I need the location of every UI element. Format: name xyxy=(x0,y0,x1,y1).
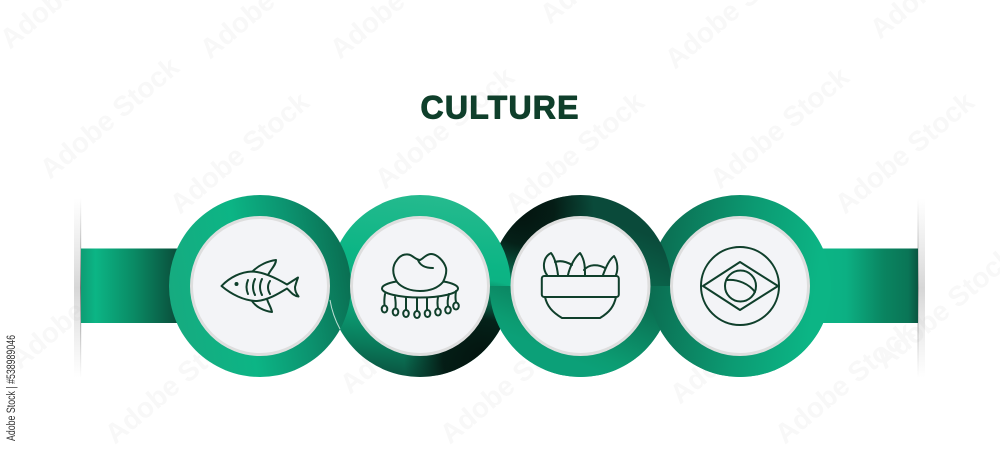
watermark: Adobe Stock xyxy=(4,241,155,375)
watermark: Adobe Stock xyxy=(434,316,585,450)
right end cap line xyxy=(918,198,925,378)
right ribbon band xyxy=(820,248,918,323)
watermark: Adobe Stock xyxy=(34,51,185,185)
title: CULTURE xyxy=(420,90,578,126)
watermark: Adobe Stock xyxy=(769,316,920,450)
interlocking rings xyxy=(169,195,831,377)
icon: brazil flag xyxy=(701,247,779,325)
icon: shark xyxy=(222,260,298,312)
watermark: Adobe Stock xyxy=(829,86,980,220)
watermark: Adobe Stock xyxy=(334,266,485,400)
stock id side label: Adobe Stock | #538989046 xyxy=(6,335,18,441)
panel: hat xyxy=(352,218,488,354)
watermark: Adobe Stock xyxy=(704,61,855,195)
watermark: Adobe Stock xyxy=(99,316,250,450)
panel: bowl xyxy=(512,218,649,354)
infographic canvas xyxy=(6,95,925,441)
watermark: Adobe Stock xyxy=(664,276,815,410)
icon: bowl of leaves xyxy=(542,253,619,318)
watermark: Adobe Stock xyxy=(499,86,650,220)
panel: flag xyxy=(672,218,808,354)
watermark: Adobe Stock xyxy=(164,86,315,220)
left ribbon band xyxy=(81,248,181,323)
panel: shark xyxy=(192,218,328,354)
watermark: Adobe Stock xyxy=(369,61,520,195)
left end cap line xyxy=(74,198,81,378)
icon: fringed hat xyxy=(382,254,459,318)
